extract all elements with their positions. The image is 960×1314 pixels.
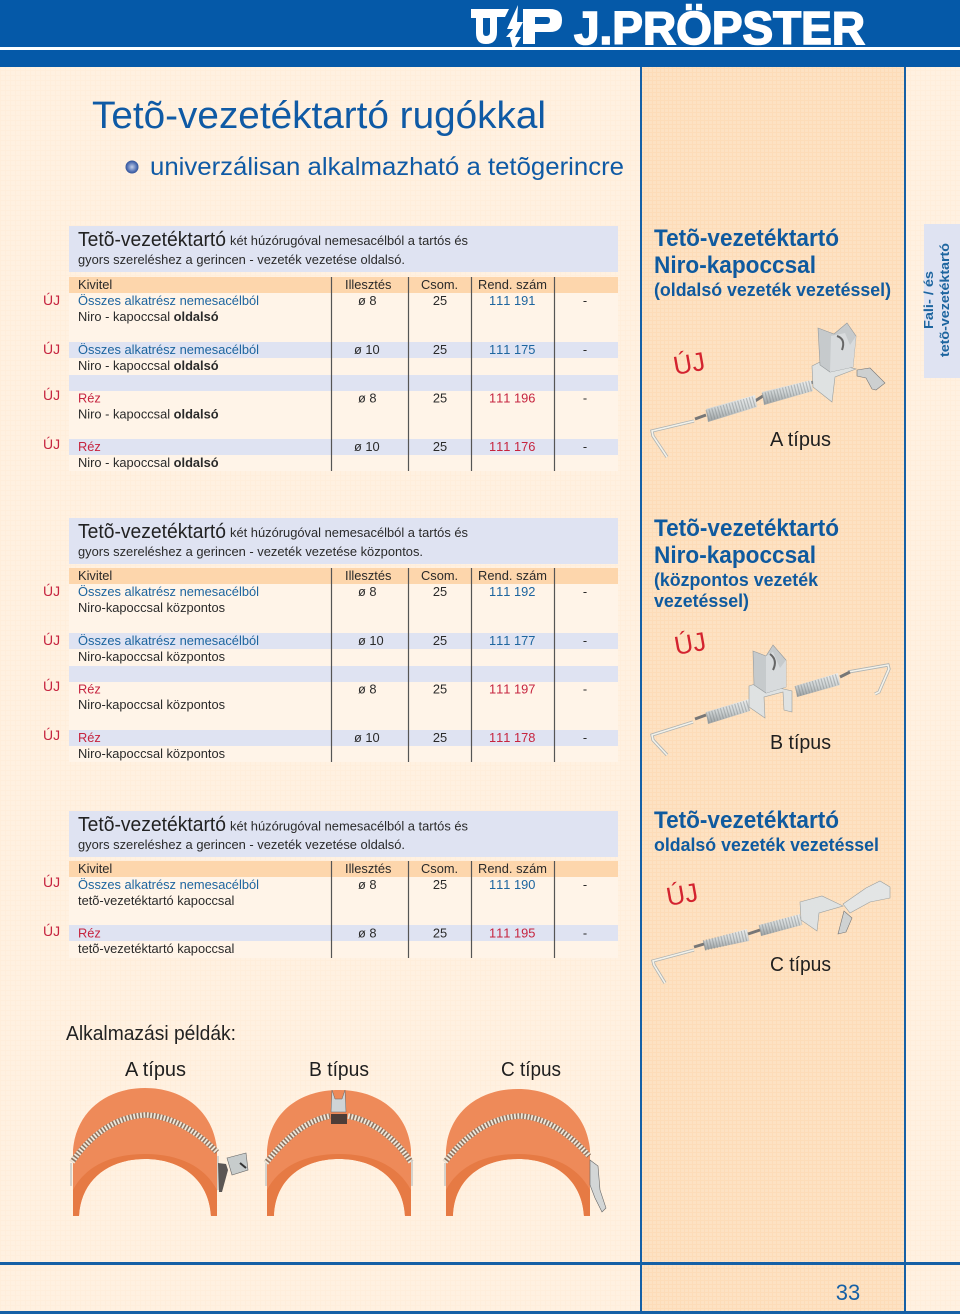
side tab: tetõ-vezetéktartó — [937, 243, 952, 357]
panel: table 2: Réz — [78, 682, 101, 696]
panel: table 3: Csom. — [421, 861, 458, 876]
panel: table 2: ÚJ — [43, 583, 60, 599]
panel: table 3: ø 8 — [358, 877, 377, 892]
panel: table 2: Csom. — [421, 568, 458, 583]
panel: table 3: Összes alkatrész nemesacélból — [78, 877, 259, 892]
new badge A: ÚJ — [671, 346, 707, 381]
footer rule — [0, 1262, 960, 1265]
type label C: C típus — [770, 954, 831, 976]
example A: ridge tile with clamp — [71, 1088, 248, 1216]
panel: table 1: 111 196 — [489, 390, 535, 406]
product heading B: vezetéssel) — [654, 591, 749, 611]
panel: table 1: - — [583, 342, 587, 357]
panel: table 1: 111 191 — [489, 293, 535, 308]
panel: table 2: gyors szereléshez a gerincen - vezeték vezetése központos. — [78, 544, 423, 559]
panel: table 1: Tetõ-vezetéktartó — [78, 229, 226, 251]
panel: table 3: Tetõ-vezetéktartó — [78, 814, 226, 836]
panel: table 3: tetõ-vezetéktartó kapoccsal — [78, 893, 234, 908]
panel: table 2: Réz — [78, 730, 101, 745]
product heading B: Tetõ-vezetéktartó — [654, 515, 839, 542]
panel: table 1: Összes alkatrész nemesacélból — [78, 342, 259, 357]
type label B: B típus — [770, 732, 831, 754]
right column band — [641, 66, 904, 1314]
panel: table 1: ÚJ — [43, 341, 60, 357]
panel: table 2: 25 — [433, 633, 447, 648]
panel: table 2: ø 8 — [358, 682, 377, 696]
panel: table 2: 111 197 — [489, 682, 535, 696]
example B: ridge tile with clamp — [266, 1090, 412, 1216]
panel: table 1: ø 10 — [354, 439, 380, 454]
icon: clamp type C — [653, 881, 890, 983]
panel: table 2: Kivitel — [78, 568, 112, 583]
panel: table 1: 111 176 — [489, 439, 535, 454]
example label C: C típus — [501, 1059, 561, 1081]
panel: table 2: 25 — [433, 682, 447, 696]
panel: table 2: Niro-kapoccsal központos — [78, 649, 225, 664]
panel: table 2: 25 — [433, 730, 447, 745]
product heading A: Tetõ-vezetéktartó — [654, 225, 839, 252]
panel: table 2: ÚJ — [43, 632, 60, 648]
panel: table 3: Réz — [78, 926, 101, 940]
panel: table 2: Rend. szám — [478, 568, 547, 583]
panel: table 1: - — [583, 390, 587, 406]
panel: table 1: ÚJ — [43, 436, 60, 452]
panel: table 1: gyors szereléshez a gerincen - vezeték vezetése oldalsó. — [78, 252, 405, 267]
panel: table 1: ø 10 — [354, 342, 380, 357]
panel: table 2: ÚJ — [43, 727, 60, 743]
panel: table 1: 25 — [433, 293, 447, 308]
page number: 33 — [836, 1280, 860, 1305]
panel: table 3: tetõ-vezetéktartó kapoccsal — [78, 941, 234, 956]
panel: table 3: - — [583, 877, 587, 892]
panel: table 1: ÚJ — [43, 292, 60, 308]
panel: table 2: két húzórugóval nemesacélból a tartós és — [230, 525, 468, 540]
column rule right — [904, 66, 906, 1314]
panel: table 1: Kivitel — [78, 277, 112, 292]
subtitle with bullet: univerzálisan alkalmazható a tetõgerincre — [150, 153, 624, 181]
panel: table 1: Rend. szám — [478, 277, 547, 292]
side tab — [921, 224, 960, 378]
panel: table 2: 111 192 — [489, 584, 535, 599]
panel: table 3: ÚJ — [43, 874, 60, 890]
logo wordmark: J.PRÖPSTER — [574, 2, 865, 54]
panel: table 2: 111 177 — [489, 633, 535, 648]
panel: table 3 — [43, 811, 618, 958]
panel: table 1: Réz — [78, 390, 101, 406]
panel: table 3: két húzórugóval nemesacélból a tartós és — [230, 818, 468, 834]
panel: table 3: 111 195 — [489, 926, 535, 940]
panel: table 3: - — [583, 926, 587, 940]
panel: table 2: - — [583, 584, 587, 599]
panel: table 2 — [43, 518, 618, 762]
product heading A — [654, 225, 891, 300]
product heading B: Niro-kapoccsal — [654, 542, 816, 569]
panel: table 2: Niro-kapoccsal központos — [78, 697, 225, 712]
panel: table 3: Illesztés — [345, 861, 391, 876]
panel: table 2: ø 10 — [358, 633, 384, 648]
side tab: Fali- / és — [921, 271, 936, 329]
panel: table 1: - — [583, 293, 587, 308]
icon: clamp type B — [652, 645, 889, 755]
panel: table 1: Összes alkatrész nemesacélból — [78, 293, 259, 308]
panel: table 1: Niro - kapoccsal oldalsó — [78, 406, 219, 422]
panel: table 1 — [43, 226, 618, 471]
product heading A: (oldalsó vezeték vezetéssel) — [654, 280, 891, 300]
panel: table 1: ø 8 — [358, 390, 377, 406]
panel: table 1: ÚJ — [43, 387, 60, 403]
example C: ridge tile with clamp — [445, 1089, 606, 1216]
panel: table 2: Összes alkatrész nemesacélból — [78, 633, 259, 648]
product heading B: (központos vezeték — [654, 570, 819, 590]
title: Tetõ-vezetéktartó rugókkal — [92, 95, 546, 137]
panel: table 2: ø 8 — [358, 584, 377, 599]
panel: table 1: 111 175 — [489, 342, 535, 357]
examples heading: Alkalmazási példák: — [66, 1023, 236, 1045]
panel: table 3: Kivitel — [78, 861, 112, 876]
panel: table 3: gyors szereléshez a gerincen - vezeték vezetése oldalsó. — [78, 837, 405, 852]
product heading B — [654, 515, 839, 611]
panel: table 2: ÚJ — [43, 678, 60, 694]
product heading C — [654, 807, 879, 855]
logo mark — [471, 5, 562, 50]
panel: table 3: ÚJ — [43, 923, 60, 939]
panel: table 2: Niro-kapoccsal központos — [78, 600, 225, 615]
panel: table 2: ø 10 — [354, 730, 380, 745]
panel: table 2: Összes alkatrész nemesacélból — [78, 584, 259, 599]
panel: table 2: Niro-kapoccsal központos — [78, 746, 225, 761]
panel: table 1: Niro - kapoccsal oldalsó — [78, 309, 219, 324]
panel: table 1: Niro - kapoccsal oldalsó — [78, 358, 219, 373]
panel: table 2: - — [583, 633, 587, 648]
column rule left — [640, 66, 642, 1314]
panel: table 2: 111 178 — [489, 730, 535, 745]
panel: table 1: 25 — [433, 439, 447, 454]
header bar — [0, 0, 960, 67]
panel: table 1: 25 — [433, 342, 447, 357]
type label A: A típus — [770, 429, 831, 451]
bottom bar — [0, 1311, 960, 1314]
panel: table 2: Illesztés — [345, 568, 391, 583]
product heading A: Niro-kapoccsal — [654, 252, 816, 279]
panel: table 1: két húzórugóval nemesacélból a tartós és — [230, 233, 468, 248]
panel: table 1: Niro - kapoccsal oldalsó — [78, 455, 219, 470]
panel: table 3: ø 8 — [358, 926, 377, 940]
panel: table 2: - — [583, 682, 587, 696]
panel: table 1: Illesztés — [345, 277, 391, 292]
product heading C: Tetõ-vezetéktartó — [654, 807, 839, 834]
panel: table 3: Rend. szám — [478, 861, 547, 876]
panel: table 3: 111 190 — [489, 877, 535, 892]
product heading C: oldalsó vezeték vezetéssel — [654, 835, 879, 855]
panel: table 1: 25 — [433, 390, 447, 406]
icon: clamp type A — [652, 323, 885, 457]
panel: table 1: Csom. — [421, 277, 458, 292]
panel: table 3: 25 — [433, 877, 447, 892]
example label B: B típus — [309, 1059, 369, 1081]
panel: table 1: Réz — [78, 439, 101, 454]
new badge B: ÚJ — [672, 626, 708, 661]
panel: table 2: 25 — [433, 584, 447, 599]
panel: table 1: ø 8 — [358, 293, 377, 308]
panel: table 2: - — [583, 730, 587, 745]
panel: table 2: Tetõ-vezetéktartó — [78, 521, 226, 543]
example label A: A típus — [125, 1059, 186, 1081]
panel: table 1: - — [583, 439, 587, 454]
new badge C: ÚJ — [664, 877, 700, 912]
panel: table 3: 25 — [433, 926, 447, 940]
